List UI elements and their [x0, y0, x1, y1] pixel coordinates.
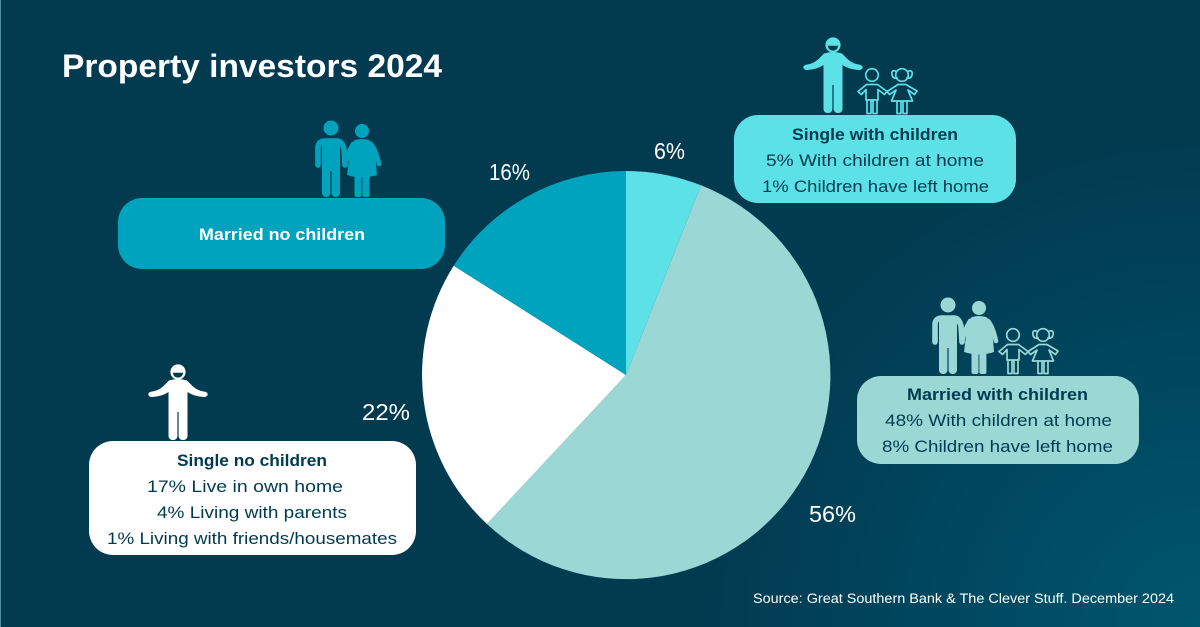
callout: married with children: 48% With children at home	[885, 411, 1112, 430]
icon: married couple	[318, 120, 379, 197]
percentage label 16%: 16%	[489, 159, 530, 185]
callout: single no children: 17% Live in own home	[147, 477, 343, 496]
slice: married with children 56%	[487, 185, 830, 579]
callout: single with children: 5% With children at home	[766, 151, 984, 170]
percentage label 6%: 6%	[654, 138, 685, 164]
icon: single person	[148, 364, 208, 440]
slice: single with children 6%	[626, 171, 701, 375]
callout: single no children: Single no children	[177, 451, 327, 470]
source note: Source: Great Southern Bank & The Clever Stuff. December 2024	[753, 591, 1175, 606]
callout: married no children: Married no children	[199, 225, 365, 244]
callout: single no children	[89, 441, 416, 555]
percentage label 56%: 56%	[809, 501, 856, 527]
callout: single with children	[734, 115, 1016, 203]
callout: married with children	[857, 376, 1139, 464]
slice: single no children 22%	[422, 266, 626, 524]
percentage label 22%: 22%	[362, 399, 410, 425]
callout: single no children: 1% Living with friends/housemates	[107, 529, 397, 548]
icon: married couple with children	[935, 298, 1058, 374]
pie chart	[422, 171, 830, 579]
callout: single with children: 1% Children have left home	[762, 177, 989, 196]
icon: single parent with children	[803, 37, 917, 114]
callout: married with children: 8% Children have left home	[882, 437, 1113, 456]
callout: single no children: 4% Living with parents	[157, 503, 347, 522]
callout: married no children	[118, 198, 445, 269]
callout: single with children: Single with children	[792, 125, 958, 144]
title: Property investors 2024	[62, 48, 442, 84]
callout: married with children: Married with children	[907, 385, 1088, 404]
slice: married no children 16%	[454, 171, 626, 375]
